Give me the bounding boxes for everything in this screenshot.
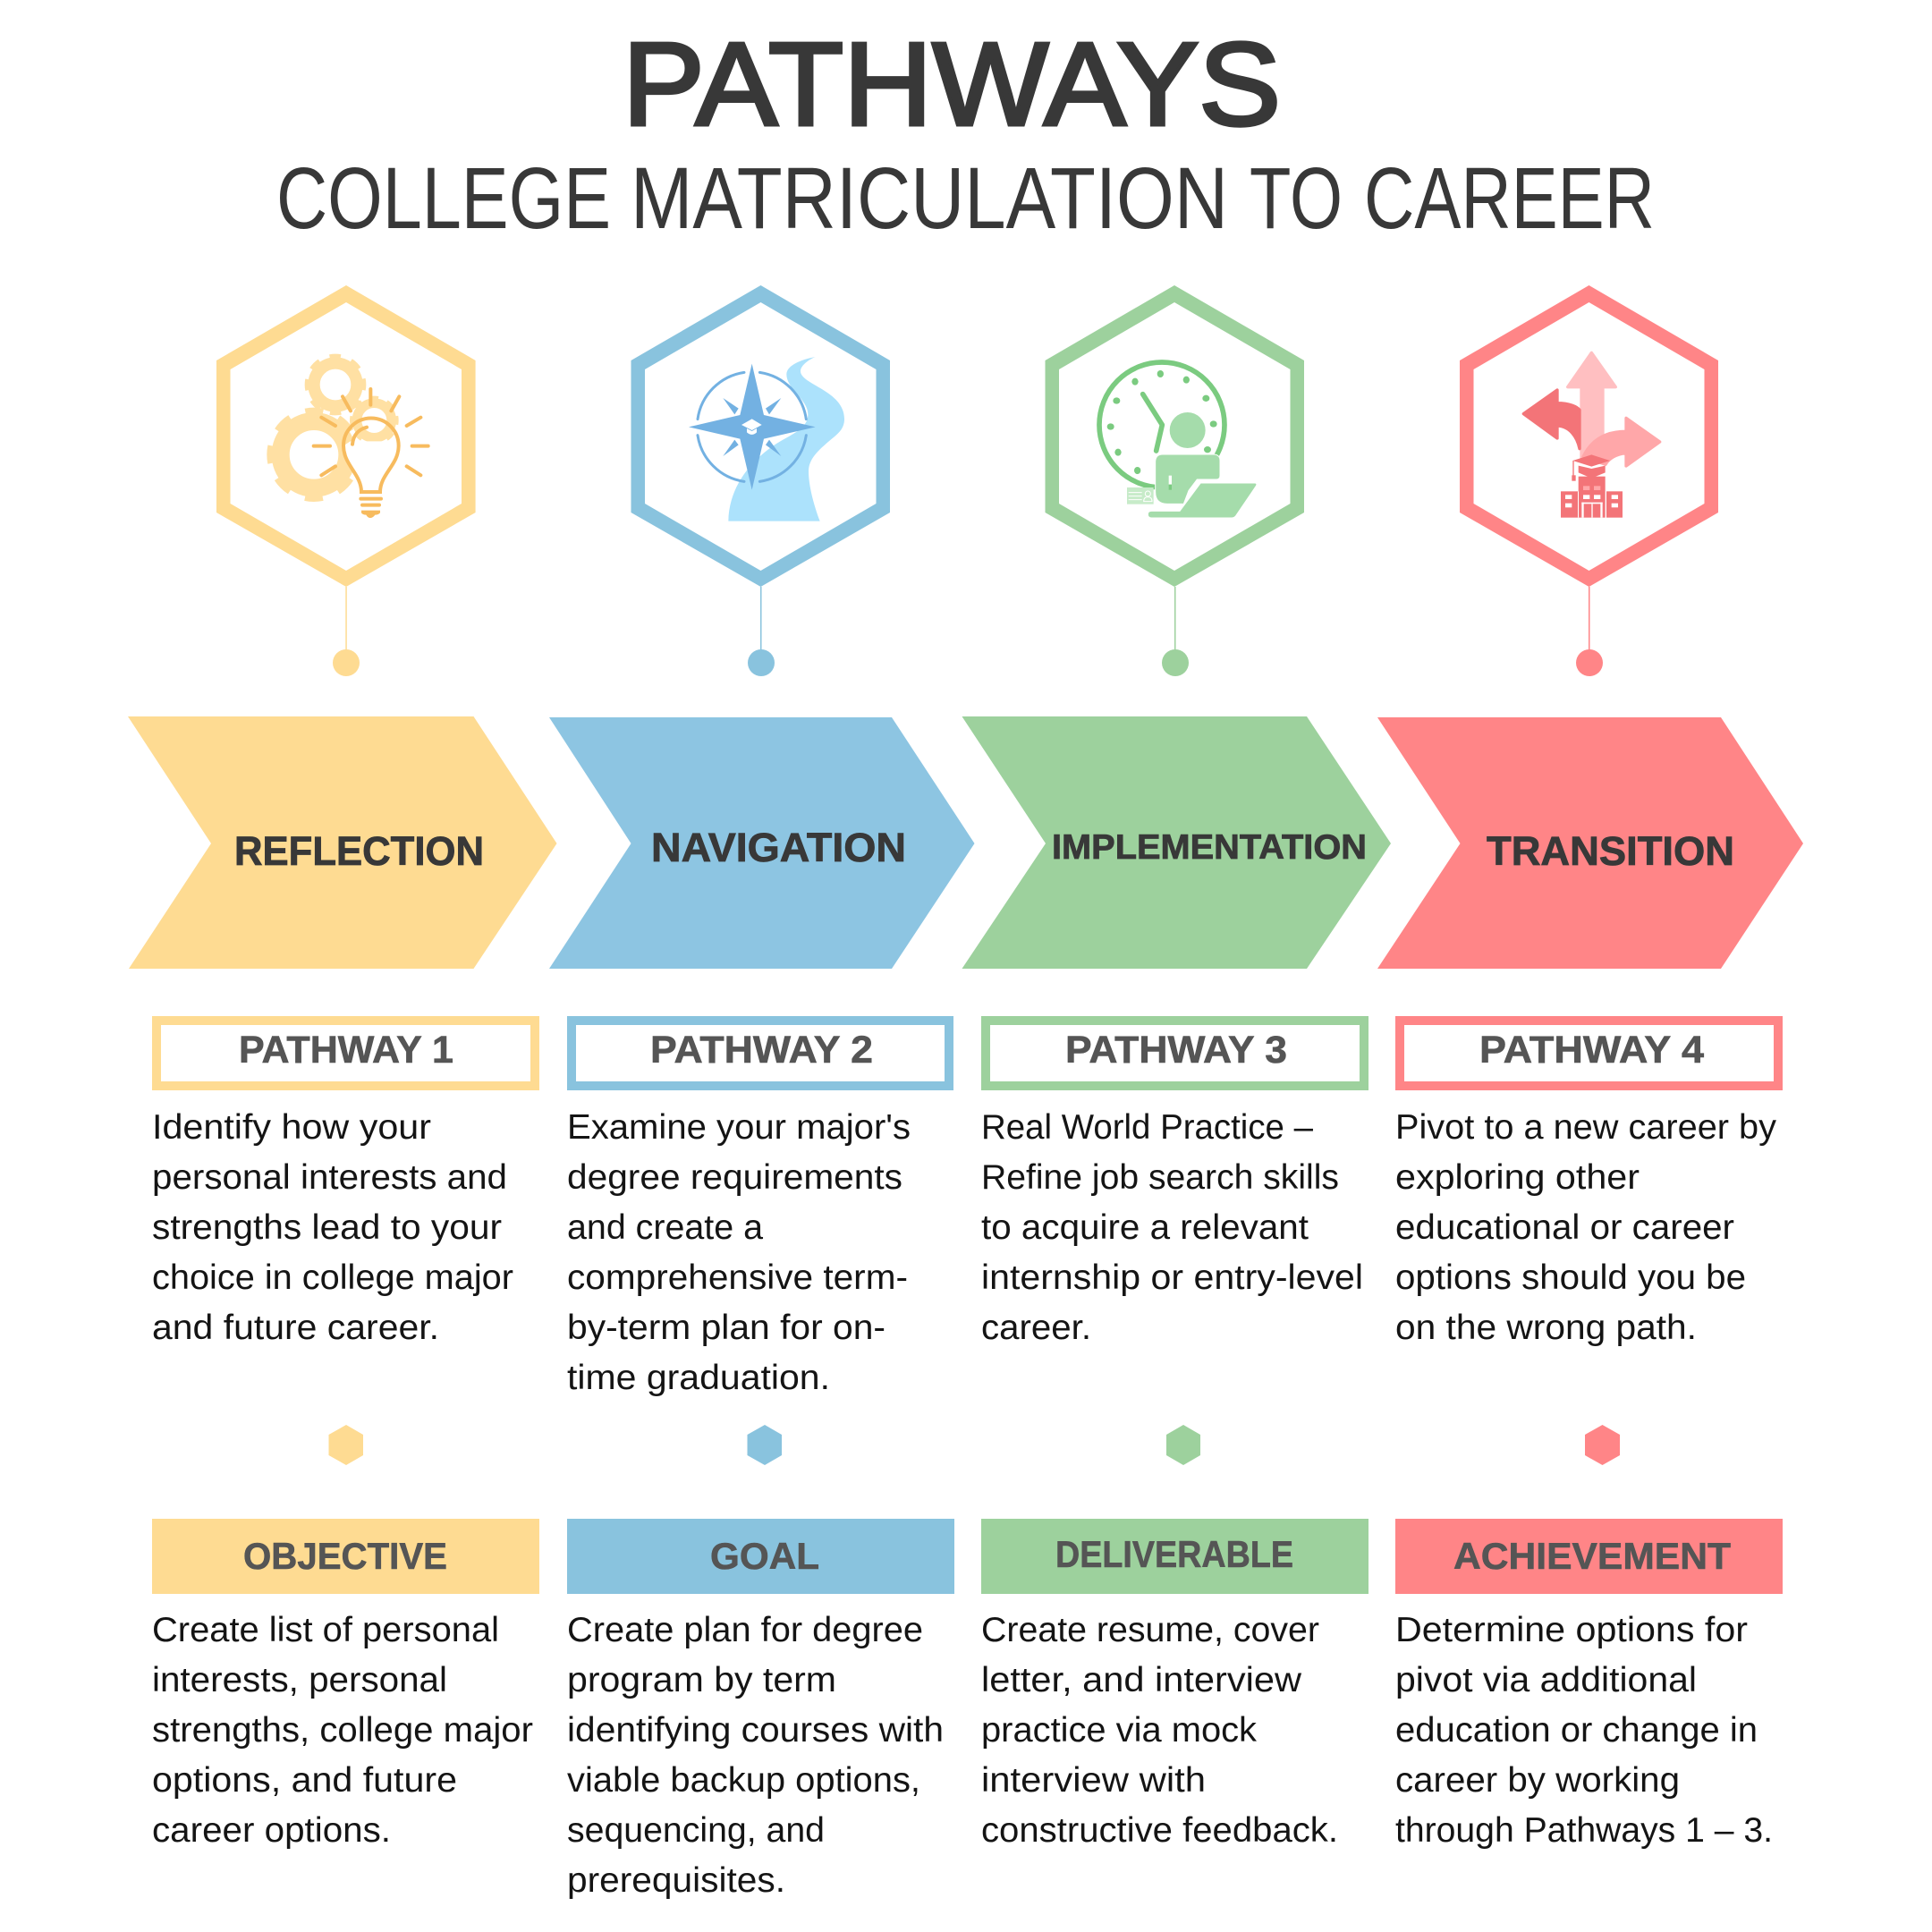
objective description: options, and future <box>152 1761 457 1800</box>
subtitle: TO <box>1250 149 1343 247</box>
chevron: transition <box>1377 717 1803 969</box>
subtitle <box>276 149 1655 247</box>
goal description: prerequisites. <box>567 1861 785 1900</box>
achievement description: through Pathways 1 – 3. <box>1395 1811 1773 1850</box>
icon: clock, person at laptop and resume <box>1099 362 1257 518</box>
pathway 2 description: time graduation. <box>567 1359 830 1397</box>
goal description: sequencing, and <box>567 1811 825 1850</box>
goal description: identifying courses with <box>567 1711 944 1750</box>
deliverable description: letter, and interview <box>981 1661 1302 1699</box>
goal description: Create plan for degree <box>567 1611 923 1649</box>
pathway 4 label box: PATHWAY 4 <box>1479 1030 1704 1072</box>
connector and dot: transition <box>1576 587 1603 676</box>
pathway 2 description: degree requirements <box>567 1158 902 1197</box>
pathway 3 label box: PATHWAY 3 <box>1065 1030 1287 1072</box>
pathway 3 description: Real World Practice – <box>981 1108 1313 1147</box>
pathway 1 description: personal interests and <box>152 1158 507 1197</box>
achievement description: pivot via additional <box>1395 1661 1697 1699</box>
pathway 3 label box <box>986 1021 1364 1086</box>
deliverable description <box>981 1611 1338 1850</box>
achievement description: Determine options for <box>1395 1611 1748 1649</box>
chevron: navigation: NAVIGATION <box>651 825 906 870</box>
goal description: program by term <box>567 1661 836 1699</box>
objective banner: OBJECTIVE <box>243 1535 447 1577</box>
deliverable description: constructive feedback. <box>981 1811 1338 1850</box>
pathway 3 description: internship or entry-level <box>981 1258 1363 1297</box>
icon: gears and lightbulb <box>272 357 428 518</box>
title: PATHWAYS <box>623 18 1281 150</box>
pathway 1 description: and future career. <box>152 1309 439 1347</box>
connector and dot: reflection <box>333 587 360 676</box>
objective description: Create list of personal <box>152 1611 499 1649</box>
chevron: implementation: IMPLEMENTATION <box>1052 828 1367 867</box>
objective description: strengths, college major <box>152 1711 533 1750</box>
pathway 4 description: on the wrong path. <box>1395 1309 1697 1347</box>
pathway 4 label box <box>1400 1021 1778 1086</box>
panel: pathway 2 <box>567 1021 954 1900</box>
chevron: transition: TRANSITION <box>1487 828 1734 874</box>
subtitle: COLLEGE <box>276 149 611 247</box>
panel: reflection hexagon with lightbulb icon <box>216 285 476 587</box>
pathway 2 description: Examine your major's <box>567 1108 911 1147</box>
goal description: viable backup options, <box>567 1761 920 1800</box>
pathway 4 description <box>1395 1108 1777 1347</box>
pathway 3 description: career. <box>981 1309 1091 1347</box>
deliverable description: interview with <box>981 1761 1206 1800</box>
pathway 4 description: exploring other <box>1395 1158 1640 1197</box>
deliverable banner <box>981 1519 1368 1594</box>
goal description <box>567 1611 944 1900</box>
objective description: career options. <box>152 1811 391 1850</box>
deliverable description: Create resume, cover <box>981 1611 1319 1649</box>
pathway 1 label box: PATHWAY 1 <box>239 1030 453 1072</box>
pathway 1 description <box>152 1108 513 1347</box>
pathway 2 label box <box>572 1021 949 1086</box>
achievement description: education or change in <box>1395 1711 1758 1750</box>
pathway 3 description: Refine job search skills <box>981 1158 1339 1197</box>
panel: pathway 3 <box>981 1021 1368 1850</box>
pathway 1 description: choice in college major <box>152 1258 513 1297</box>
pathway 4 description: options should you be <box>1395 1258 1746 1297</box>
subtitle: CAREER <box>1364 149 1655 247</box>
goal banner <box>567 1519 954 1594</box>
pathway 3 description: to acquire a relevant <box>981 1208 1309 1247</box>
pathway 1 description: Identify how your <box>152 1108 431 1147</box>
pathway 2 description: and create a <box>567 1208 763 1247</box>
pathway 2 label box: PATHWAY 2 <box>650 1030 873 1072</box>
panel: transition hexagon with arrows icon <box>1460 285 1718 587</box>
hexagon bullet <box>1166 1425 1200 1465</box>
pathway 1 description: strengths lead to your <box>152 1208 502 1247</box>
pathway 4 description: Pivot to a new career by <box>1395 1108 1777 1147</box>
objective banner <box>152 1519 539 1594</box>
hexagon bullet <box>329 1425 363 1465</box>
hexagon bullet <box>1585 1425 1620 1465</box>
deliverable description: practice via mock <box>981 1711 1258 1750</box>
chevron: reflection <box>128 716 556 969</box>
pathway 2 description: by-term plan for on- <box>567 1309 886 1347</box>
deliverable banner: DELIVERABLE <box>1055 1533 1293 1575</box>
panel: pathway 4 <box>1395 1021 1783 1850</box>
achievement description: career by working <box>1395 1761 1680 1800</box>
pathway 3 description <box>981 1108 1363 1347</box>
chevron: navigation <box>549 717 975 969</box>
achievement banner <box>1395 1519 1783 1594</box>
pathway 2 description <box>567 1108 911 1397</box>
achievement description <box>1395 1611 1773 1850</box>
subtitle: MATRICULATION <box>631 149 1228 247</box>
connector and dot: implementation <box>1162 587 1189 676</box>
objective description <box>152 1611 533 1850</box>
hexagon bullet <box>748 1425 782 1465</box>
connector and dot: navigation <box>748 587 775 676</box>
chevron: reflection: REFLECTION <box>234 828 484 874</box>
goal banner: GOAL <box>710 1535 819 1577</box>
chevron: implementation <box>962 716 1391 969</box>
icon: diverging arrows and college building <box>1523 352 1660 518</box>
panel: navigation hexagon with compass icon <box>631 285 890 587</box>
panel: pathway 1 <box>152 1021 539 1850</box>
pathway 4 description: educational or career <box>1395 1208 1734 1247</box>
pathway 1 label box <box>157 1021 535 1086</box>
panel: implementation hexagon with clock icon <box>1045 285 1304 587</box>
achievement banner: ACHIEVEMENT <box>1453 1535 1731 1577</box>
icon: compass and river <box>689 357 844 521</box>
objective description: interests, personal <box>152 1661 447 1699</box>
pathway 2 description: comprehensive term- <box>567 1258 908 1297</box>
